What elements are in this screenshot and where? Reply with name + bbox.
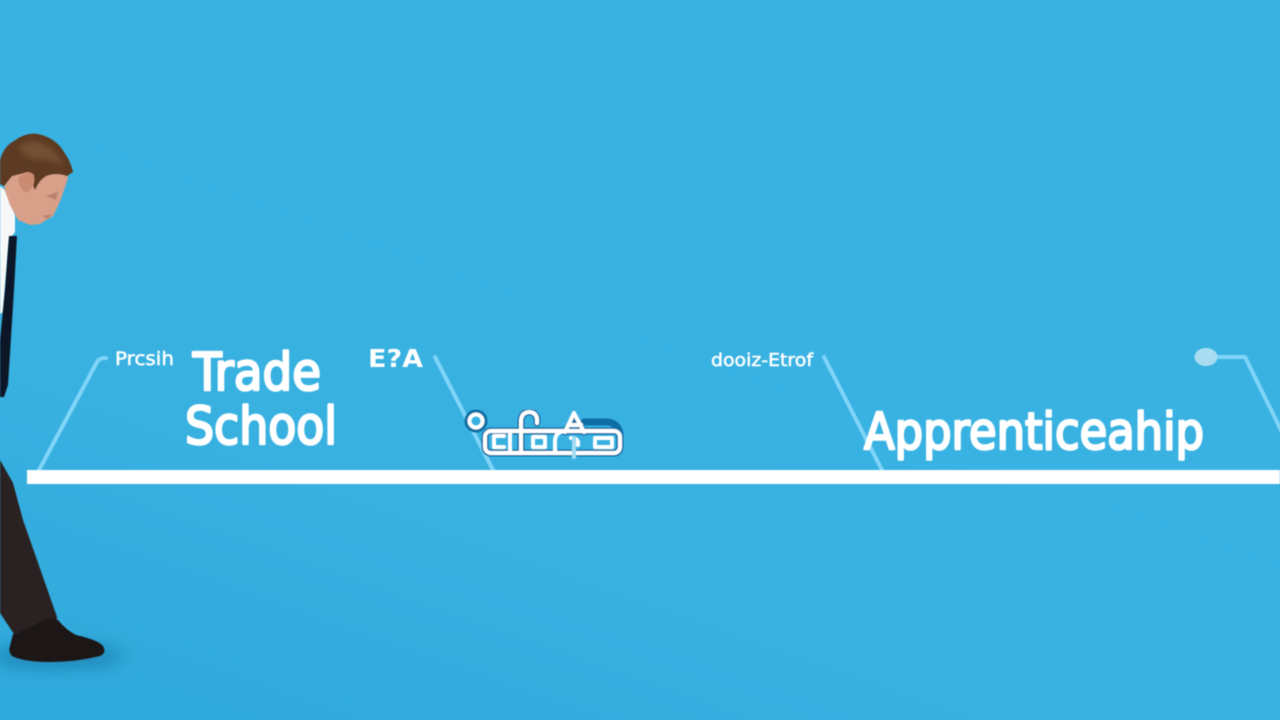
label: small centre-right: dooiz-Etrof bbox=[711, 350, 814, 371]
label: small EPA: E?A bbox=[368, 344, 424, 373]
hair bbox=[0, 134, 73, 190]
connector line 3 bbox=[824, 357, 882, 470]
heading: Trade School: School bbox=[185, 397, 337, 457]
timeline bar bbox=[27, 470, 1280, 484]
connector line 4 with dot bbox=[1194, 348, 1280, 432]
ear bbox=[18, 172, 34, 192]
label: small left: Prcsih bbox=[115, 348, 174, 370]
shoe shadow bbox=[0, 647, 124, 665]
shoe bbox=[9, 618, 104, 662]
icon: garbled outlined logo bbox=[468, 412, 620, 457]
heading: Apprenticeship: Apprenticeahip bbox=[864, 403, 1204, 462]
shirt bbox=[0, 186, 15, 314]
trousers bbox=[0, 460, 57, 634]
connector line 1 bbox=[39, 358, 106, 470]
mouth and eye shading bbox=[42, 192, 58, 219]
connector line 2 bbox=[435, 357, 493, 470]
hair highlight bbox=[18, 141, 64, 166]
face bbox=[4, 170, 68, 225]
necktie bbox=[0, 236, 17, 397]
illustration: man looking down bbox=[0, 134, 124, 665]
heading: Trade School: Trade bbox=[192, 343, 321, 403]
heading: Trade School bbox=[185, 343, 337, 457]
